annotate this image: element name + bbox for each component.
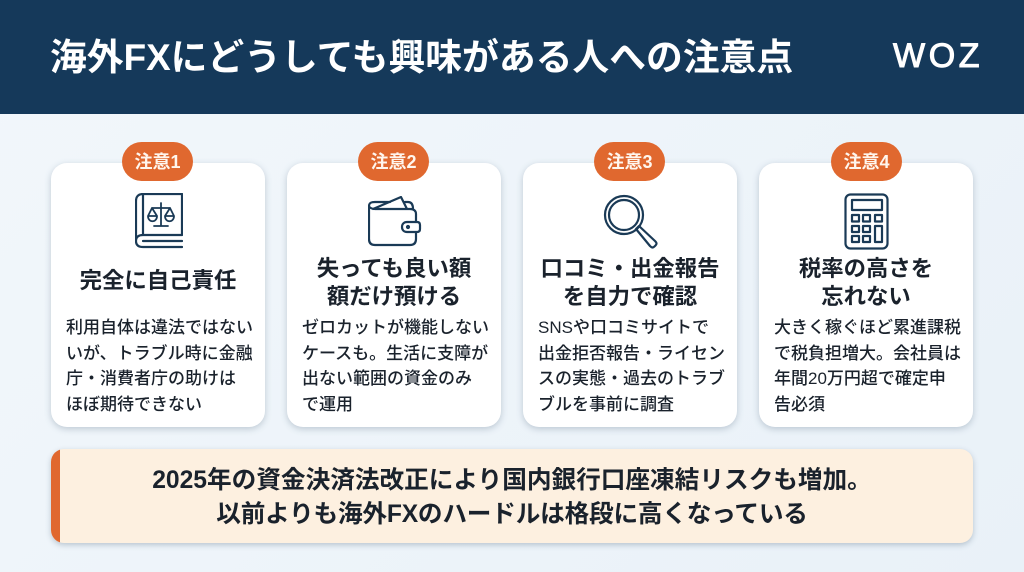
body text: スの実態・過去のトラブ <box>538 369 725 388</box>
badge: 注意2 <box>358 142 429 181</box>
heading <box>799 256 933 309</box>
body text: 出金拒否報告・ライセン <box>538 344 725 363</box>
heading: 額だけ預ける <box>327 284 461 309</box>
body text: 利用自体は違法ではない <box>66 318 253 337</box>
icon: wallet <box>368 196 422 246</box>
callout accent bar <box>51 449 60 543</box>
body text: 年間20万円超で確定申 <box>774 369 946 388</box>
header band <box>0 0 1024 114</box>
heading <box>540 256 720 309</box>
badge: 注意4 <box>831 142 902 181</box>
logo: WOZ <box>893 37 983 75</box>
body text <box>66 318 253 414</box>
callout text: 以前よりも海外FXのハードルは格段に高くなっている <box>216 500 808 528</box>
callout text <box>152 466 872 528</box>
panel: caution 2 <box>287 163 501 427</box>
body text <box>774 318 961 414</box>
heading: 失っても良い額 <box>317 256 471 280</box>
badge: 注意3: 注意3 <box>606 152 652 172</box>
body text: で運用 <box>302 395 353 414</box>
body text: 告必須 <box>774 395 825 414</box>
heading: 完全に自己責任 <box>80 268 236 293</box>
icon: calculator <box>844 193 889 250</box>
heading: 忘れない <box>821 284 911 309</box>
body text: ほぼ期待できない <box>66 395 202 414</box>
body text: いが、トラブル時に金融 <box>66 344 253 363</box>
heading <box>317 256 471 309</box>
body text: で税負担増大。会社員は <box>774 344 961 363</box>
heading: を自力で確認 <box>563 284 697 309</box>
body text: ブルを事前に調査 <box>538 395 674 414</box>
panel: caution 1 <box>51 163 265 427</box>
body text: ケースも。生活に支障が <box>302 344 488 363</box>
badge: 注意4: 注意4 <box>843 152 890 172</box>
panel: caution 4 <box>759 163 973 427</box>
panel: caution 3 <box>523 163 737 427</box>
body text: 庁・消費者庁の助けは <box>66 369 236 388</box>
icon: magnifying glass <box>604 194 658 249</box>
body text: SNSや口コミサイトで <box>538 318 709 337</box>
badge: 注意2: 注意2 <box>370 152 416 172</box>
body text <box>538 318 725 414</box>
badge: 注意1: 注意1 <box>134 152 180 172</box>
body text <box>302 318 489 414</box>
body text: 大きく稼ぐほど累進課税 <box>774 318 961 337</box>
title: 海外FXにどうしても興味がある人への注意点 <box>50 37 793 78</box>
body text: 出ない範囲の資金のみ <box>302 369 472 388</box>
badge: 注意3 <box>594 142 665 181</box>
body text: ゼロカットが機能しない <box>302 318 489 337</box>
callout text: 2025年の資金決済法改正により国内銀行口座凍結リスクも増加。 <box>152 467 872 494</box>
heading: 税率の高さを <box>799 256 933 280</box>
icon: law book <box>135 193 183 248</box>
heading: 口コミ・出金報告 <box>540 256 720 280</box>
callout <box>51 449 973 543</box>
badge: 注意1 <box>122 142 193 181</box>
